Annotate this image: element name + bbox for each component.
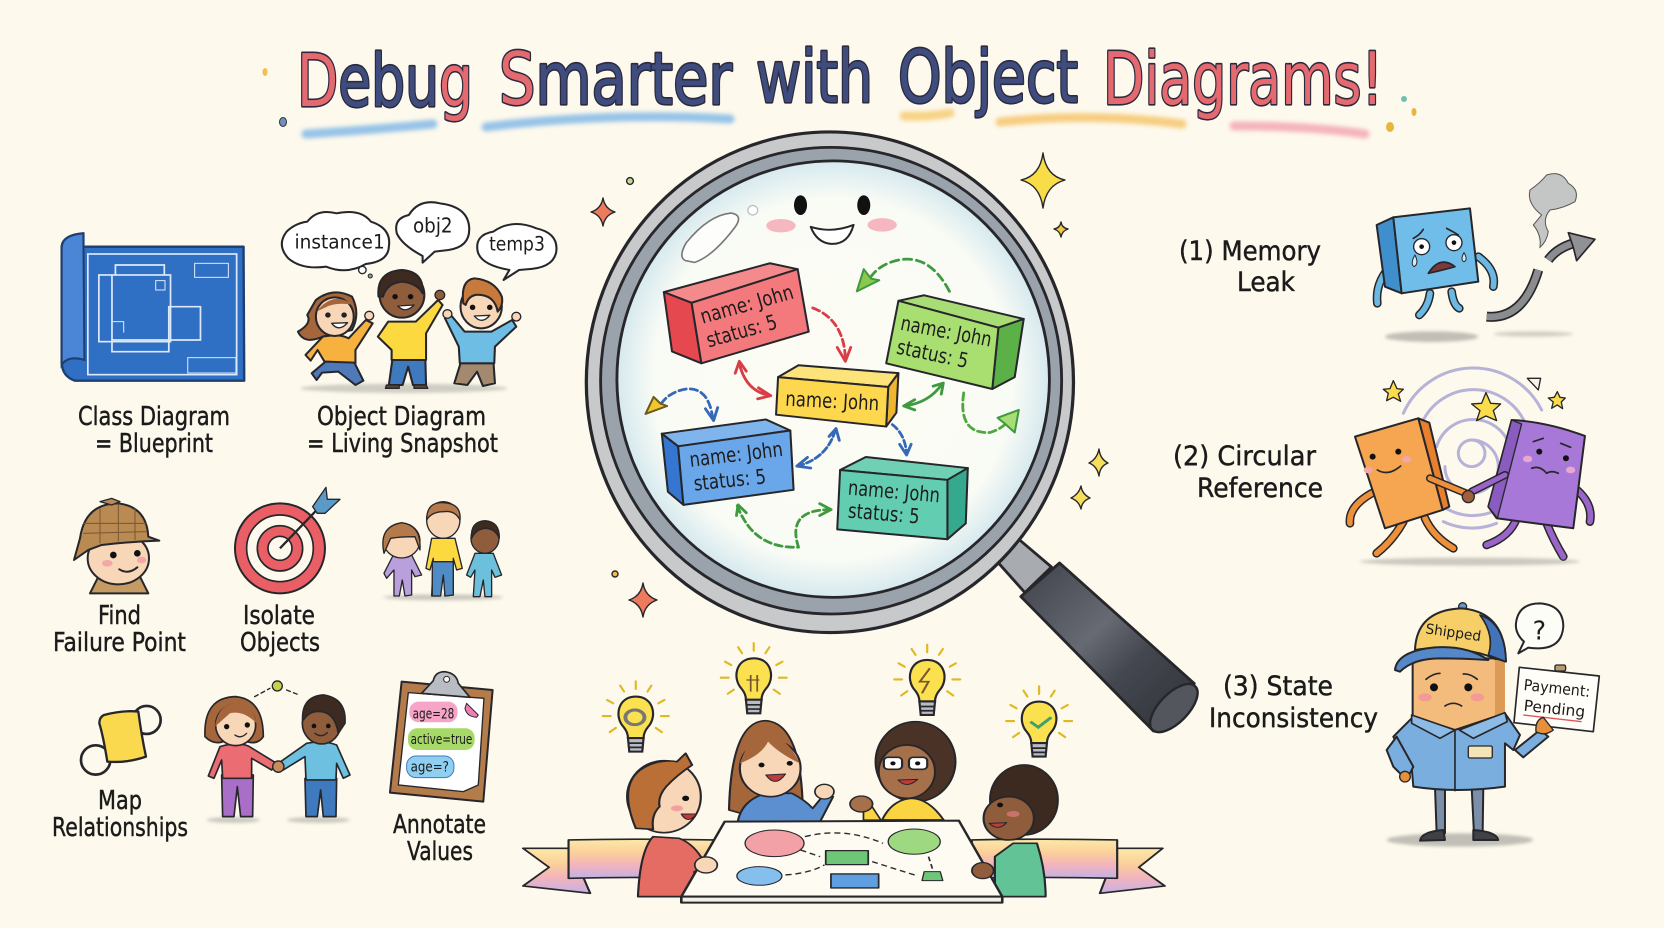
courier character [1387,603,1599,841]
speech bubble: obj2 [396,202,469,263]
panel: team collaboration [523,643,1165,903]
title [262,35,1416,134]
label: find failure point [53,601,186,658]
orange box character [1350,418,1470,553]
sparkles around lens [591,153,1108,617]
object box: blue: name: John [688,437,784,472]
title text [297,35,1383,123]
idea bulbs [603,643,1072,757]
object box: red: name: John [697,280,796,328]
icon: clipboard with annotations [390,672,493,802]
magnifying glass [586,132,1206,740]
label: find failure point: Find [98,601,141,631]
shadow [1493,331,1573,337]
panel: memory leak [1377,174,1595,342]
object box: green: status: 5 [895,335,971,373]
question speech bubble [1516,603,1563,653]
person: boy in red [627,753,715,897]
label: memory leak: Leak [1237,267,1295,298]
speech bubble: instance1: instance1 [294,231,385,254]
panel: class vs object diagram [62,202,556,393]
label: annotate values: Values [407,837,473,867]
person: boy in green [984,765,1058,897]
label: isolate objects [240,601,320,658]
label: isolate objects: Isolate [243,601,315,631]
broken arrow [1487,233,1595,317]
label: circular reference: Reference [1197,473,1323,504]
title text: Smarter [499,37,732,121]
table with diagram sheet [681,821,1002,903]
object box: yellow: name: John [785,387,880,415]
label: state inconsistency: (3) State [1223,671,1333,702]
relationship arrows [645,259,1019,547]
label: class diagram: = Blueprint [95,429,213,459]
handshake people [205,681,350,823]
label: class diagram [78,402,230,459]
lens ring [586,132,1073,633]
label: state inconsistency: Inconsistency [1209,703,1378,734]
label: annotate values: Annotate [393,810,486,840]
speech bubble: obj2: obj2 [413,214,453,238]
question speech bubble: ? [1533,615,1546,645]
object box: green [886,295,1024,389]
icon: linked yellow note [81,706,161,775]
three standing people [383,502,503,600]
speech bubble: temp3: temp3 [489,233,545,256]
speech bubble: instance1 [282,212,389,278]
swirl [1403,368,1542,528]
title confetti dots [262,68,1416,132]
label: object diagram [307,402,498,459]
icon: clipboard with annotations: age=? [411,760,449,776]
panel: debugging steps [74,487,503,823]
speech bubble: temp3 [477,224,556,280]
icon: blueprint [62,233,244,381]
panel: state inconsistency [1387,603,1599,847]
ribbon banner [523,839,1165,893]
object box: red [664,263,809,363]
dizzy stars [1383,378,1565,421]
sign: payment pending: Payment: [1523,676,1591,701]
icon: clipboard with annotations: active=true [411,732,472,748]
cap with Shipped label: Shipped [1424,621,1482,645]
label: isolate objects: Objects [240,628,320,658]
object box: teal: name: John [847,476,941,507]
title text: Object [898,35,1078,119]
label: circular reference: (2) Circular [1173,441,1317,472]
boy with arm raised [378,270,445,388]
smoke cloud [1529,174,1576,247]
ground shadow [1360,558,1580,566]
label: object diagram: = Living Snapshot [307,429,498,459]
ground shadow [300,384,507,393]
object box: yellow [776,365,898,427]
label: memory leak [1179,236,1321,298]
purple box character [1462,420,1590,557]
label: map relationships: Map [98,786,142,816]
object box: blue: status: 5 [692,465,767,495]
panel: circular reference [1350,368,1590,566]
handle [998,539,1206,740]
ground shadow [1387,833,1533,847]
label: find failure point: Failure Point [53,628,186,658]
label: object diagram: Object Diagram [317,402,486,432]
label: class diagram: Class Diagram [78,402,230,432]
icon: detective [74,498,159,593]
label: map relationships: Relationships [52,813,188,843]
boy with both arms up [443,278,521,386]
smiling face [682,195,897,262]
object box: teal [837,457,968,539]
title text: with [756,35,873,119]
icon: target with arrow [235,487,340,593]
person: woman in blue [729,721,834,822]
title underlines [306,113,1365,134]
label: annotate values [393,810,486,867]
cap with Shipped label [1395,603,1506,672]
sign: payment pending: Pending [1523,697,1586,721]
object box: red: status: 5 [703,310,780,352]
sad blue box [1377,208,1494,315]
label: state inconsistency [1209,671,1378,734]
label: map relationships [52,786,188,843]
object box: blue [662,419,794,505]
shadow [1385,331,1478,342]
title text: Debug [297,39,473,123]
title text: Diagrams! [1103,37,1383,121]
object box: teal: status: 5 [847,499,921,528]
person: woman with glasses [850,722,955,820]
icon: clipboard with annotations: age=28 [413,706,454,722]
object box: green: name: John [899,311,994,352]
sign: payment pending [1514,665,1599,734]
label: circular reference [1173,441,1323,504]
girl waving [298,292,374,385]
label: memory leak: (1) Memory [1179,236,1321,267]
